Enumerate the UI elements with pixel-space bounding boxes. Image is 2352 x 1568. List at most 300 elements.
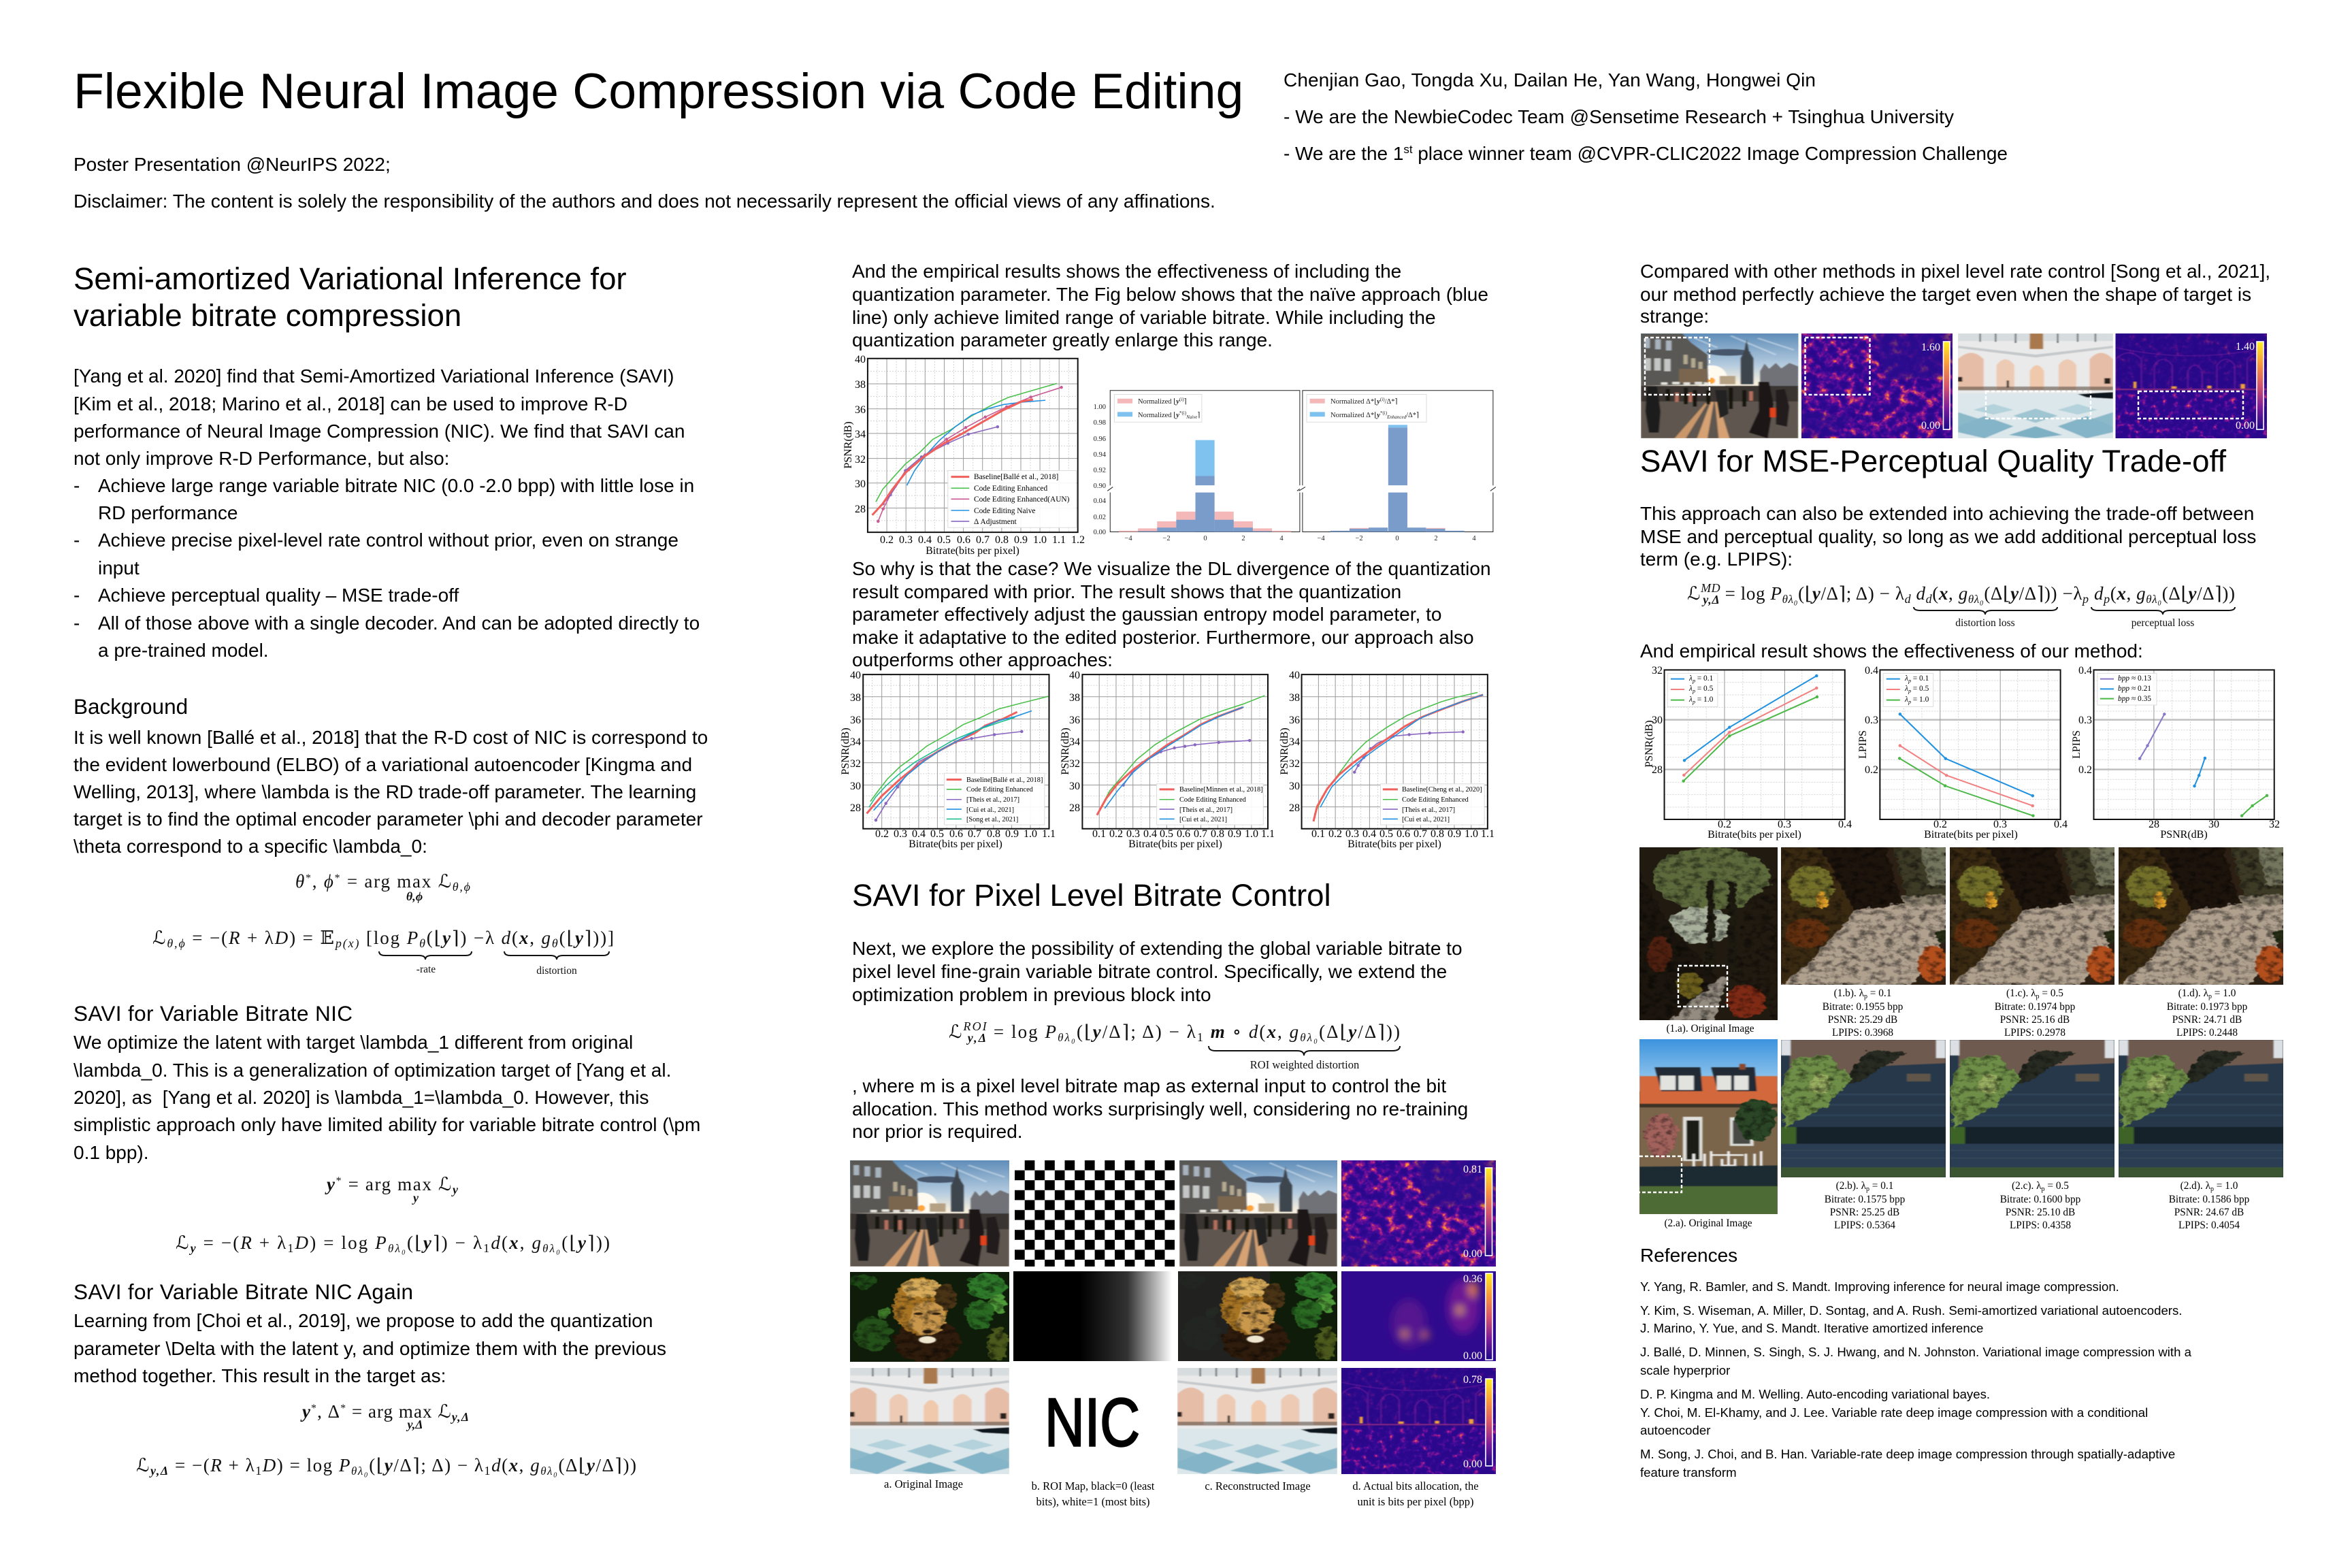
text: why is that the case: outperforms other approaches:: [852, 649, 1113, 670]
intro text and bullet list: Achieve precise pixel-level rate control without prior, even on strange: [98, 529, 679, 551]
equation: optimal parameters: θ,ϕ: [453, 880, 470, 894]
line chart: comparison with Minnen baseline: 0.9: [1228, 828, 1241, 840]
equation: L y delta: θλ₀: [540, 1465, 557, 1477]
histogram: normalized y naive: ⌉: [1184, 398, 1187, 406]
line chart: LPIPS vs PSNR: LPIPS: [2071, 730, 2082, 759]
forest captions: p: [1864, 993, 1867, 1000]
equation: optimal parameters: [295, 871, 470, 903]
line chart: comparison with Minnen baseline: 0.8: [1211, 828, 1224, 840]
equation: L y: D: [295, 1232, 309, 1253]
line chart: LPIPS vs PSNR: 30: [2208, 819, 2219, 830]
house captions: = 0.5: [2045, 1180, 2069, 1192]
line chart: LPIPS vs PSNR: 32: [2269, 819, 2280, 830]
house captions: PSNR: 24.67 dB: [2174, 1207, 2244, 1218]
text: comparison with other methods: [1640, 261, 2270, 327]
line chart: LPIPS vs bitrate: 0.3: [1993, 819, 2007, 830]
equation: rate-distortion objective with braces: [log: [360, 928, 406, 948]
line chart: comparison with Balle baseline: 0.8: [987, 828, 1000, 840]
equation: L y: ℒ: [176, 1232, 189, 1253]
text: bitmap explanation: allocation. This method works surprisingly well, considering no re-training: [852, 1098, 1468, 1120]
line chart: comparison with Minnen baseline: 0.4: [1143, 828, 1157, 840]
house captions: (2.b). λ: [1836, 1180, 1866, 1192]
histogram: normalized delta y enhanced: 2: [1434, 535, 1438, 542]
photo: lion reconstructed: [1178, 1271, 1337, 1362]
background text: [74, 727, 708, 857]
line chart: comparison with Cheng baseline: 36: [1289, 715, 1300, 726]
line chart: comparison with Cheng baseline: 0.3: [1345, 828, 1359, 840]
authors and affiliations: place winner team @CVPR-CLIC2022 Image Compression Challenge: [1413, 143, 2008, 164]
line chart: comparison with Balle baseline: 36: [850, 715, 861, 726]
text: pixel level intro: pixel level fine-grain variable bitrate control. Specifically, we extend the: [852, 961, 1447, 982]
line chart: range of variable bitrate: 0.4: [918, 534, 932, 546]
equation: L y: y⌉) − λ: [423, 1232, 482, 1253]
line chart: LPIPS vs bitrate: = 0.5: [1911, 685, 1929, 693]
equation: perceptual trade-off with braces: y/Δ⌉)): [2189, 583, 2235, 604]
equation: perceptual trade-off with braces: x, g: [2117, 583, 2146, 604]
line chart: comparison with Cheng baseline: 28: [1289, 802, 1300, 814]
line chart: comparison with Cheng baseline: Code Editing Enhanced: [1402, 796, 1469, 804]
equation: perceptual trade-off with braces: d: [1905, 592, 1912, 606]
text: empirical results: line) only achieve limited range of variable bitrate. While including the: [852, 307, 1436, 328]
equation: L y delta: θλ₀: [351, 1465, 368, 1477]
intro text and bullet list: -: [74, 585, 80, 606]
equation: L y delta: D: [262, 1455, 276, 1475]
equation: perceptual trade-off with braces: P: [1770, 583, 1782, 604]
line chart: LPIPS vs bitrate: 0.2: [1865, 764, 1878, 776]
background text: It is well known [Ballé et al., 2018] that the R-D cost of NIC is correspond to: [74, 727, 708, 748]
references list: Y. Kim, S. Wiseman, A. Miller, D. Sontag, and A. Rush. Semi-amortized variational autoencoders.: [1640, 1303, 2182, 1318]
equation: L y delta: (x, g: [502, 1455, 540, 1475]
equation: y star delta star: y,Δ: [406, 1418, 423, 1431]
photo: forest original with crop box: [1639, 847, 1778, 1020]
line chart: comparison with Minnen baseline: Baseline[Minnen et al., 2018]: [1179, 786, 1263, 794]
house captions: p: [1866, 1186, 1869, 1193]
equation: perceptual trade-off with braces: (: [1932, 583, 1938, 604]
equation: optimal parameters: θ: [295, 871, 304, 892]
line chart: range of variable bitrate: 1.1: [1052, 534, 1066, 546]
forest captions: p: [2208, 993, 2212, 1000]
histogram: normalized y naive: 0.02: [1094, 514, 1106, 521]
line chart: range of variable bitrate: 30: [855, 478, 866, 490]
line chart: comparison with Balle baseline: 0.7: [968, 828, 981, 840]
line chart: range of variable bitrate: Code Editing Enhanced: [974, 485, 1047, 493]
line chart: LPIPS vs bitrate: Bitrate(bits per pixel): [1924, 829, 2018, 840]
equation: perceptual trade-off with braces: θλ₀: [2146, 593, 2161, 606]
intro text and bullet list: -: [74, 612, 80, 634]
line chart: comparison with Cheng baseline: [Cui et al., 2021]: [1402, 816, 1450, 823]
line chart: LPIPS vs PSNR: bpp ≈ 0.13: [2118, 674, 2151, 683]
text: empirical result lead-in: And empirical result shows the effectiveness of our method:: [1640, 640, 2143, 662]
equation: ROI objective with brace: y/Δ⌉)): [1348, 1022, 1400, 1042]
line chart: PSNR vs bitrate: p: [1692, 678, 1695, 684]
line chart: comparison with Minnen baseline: 40: [1069, 670, 1080, 681]
text: trade-off intro: MSE and perceptual quality, so long as we add additional perceptual loss: [1640, 526, 2256, 547]
line chart: range of variable bitrate: 40: [855, 354, 866, 365]
references list: scale hyperprior: [1640, 1363, 1730, 1377]
histogram: normalized delta y enhanced: −4: [1317, 535, 1325, 542]
heat map: lion bits: 0.00: [1463, 1350, 1482, 1362]
line chart: range of variable bitrate: Bitrate(bits per pixel): [926, 545, 1019, 557]
line chart: comparison with Minnen baseline: 0.1: [1092, 828, 1106, 840]
line chart: LPIPS vs bitrate: p: [1908, 688, 1911, 694]
forest captions: (1.c). λ: [2006, 987, 2036, 999]
house captions: LPIPS: 0.5364: [1834, 1220, 1895, 1231]
histogram: normalized y naive: Normalized ⌊y: [1138, 398, 1179, 406]
line chart: LPIPS vs bitrate: = 0.1: [1911, 674, 1929, 683]
line chart: comparison with Balle baseline: 0.5: [930, 828, 944, 840]
text: SAVI for variable bitrate: \lambda_0. This is a generalization of optimization target of [Yang et al.: [74, 1060, 671, 1081]
text: SAVI for variable bitrate: simplistic approach only have limited ability for variable bitrate control (\pm: [74, 1114, 700, 1135]
line chart: comparison with Minnen baseline: 1.1: [1261, 828, 1275, 840]
image grid: pixel level bit allocation: [850, 1160, 1496, 1508]
line chart: PSNR vs bitrate: = 0.5: [1695, 685, 1714, 693]
line chart: range of variable bitrate: Code Editing Enhanced(AUN): [974, 495, 1070, 504]
line chart: comparison with Cheng baseline: PSNR(dB): [1279, 728, 1290, 775]
equation: rate-distortion objective with braces: θ: [419, 936, 425, 950]
photos: deck crops: [1781, 1040, 2283, 1177]
image grid captions: b. ROI Map, black=0 (least: [1032, 1480, 1155, 1492]
line chart: comparison with Minnen baseline: Code Editing Enhanced: [1179, 796, 1247, 804]
line chart: comparison with Minnen baseline: 36: [1069, 715, 1080, 726]
equation: ROI objective with brace: y/Δ⌉; Δ) − λ: [1093, 1022, 1196, 1042]
line chart: LPIPS vs bitrate: 0.4: [1865, 665, 1878, 676]
photo: market square reconstructed: [1179, 1160, 1337, 1267]
line chart: comparison with Minnen baseline: 0.3: [1126, 828, 1140, 840]
house captions: = 0.1: [1869, 1180, 1893, 1192]
equation: ROI objective with brace: ∘ d(x, g: [1232, 1022, 1298, 1042]
text: quantization parameter: parameter \Delta with the latent y, and optimize them with the previous: [74, 1338, 666, 1359]
text: trade-off intro: term (e.g. LPIPS):: [1640, 549, 1793, 570]
line chart: range of variable bitrate: 0.6: [957, 534, 970, 546]
line chart: range of variable bitrate: 0.8: [995, 534, 1009, 546]
equation: y star delta star: y: [300, 1401, 311, 1422]
line chart: comparison with Minnen baseline: 30: [1069, 781, 1080, 792]
equation: rate-distortion objective with braces: θ,ϕ: [167, 936, 185, 950]
equation: L y: [176, 1232, 610, 1255]
house captions: = 1.0: [2214, 1180, 2238, 1192]
house captions: (2.d). λ: [2180, 1180, 2210, 1192]
equation: y star delta star: *: [311, 1403, 316, 1414]
line chart: comparison with Minnen baseline: 32: [1069, 758, 1080, 770]
equation: ROI objective with brace: ℒ: [949, 1022, 962, 1042]
equation: y star delta star: = arg max ℒ: [346, 1401, 451, 1422]
histogram: normalized delta y enhanced: Normalized Δ*⌊y: [1330, 398, 1380, 406]
heading: references: References: [1640, 1245, 1737, 1266]
equation: perceptual trade-off with braces: = log: [1720, 583, 1770, 604]
text: SAVI for variable bitrate: 2020], as [Yang et al. 2020] is \lambda_1=\lambda_0. However, this: [74, 1087, 649, 1108]
equation: optimal parameters: ,: [312, 871, 323, 892]
photo: market square with target box: [1641, 333, 1798, 438]
line chart: comparison with Minnen baseline: 28: [1069, 802, 1080, 814]
authors and affiliations: - We are the NewbieCodec Team @Sensetime Research + Tsinghua University: [1284, 106, 1954, 127]
house captions: p: [2042, 1186, 2045, 1193]
equation: rate-distortion objective with braces: -rate: [416, 964, 436, 975]
references list: J. Marino, Y. Yue, and S. Mandt. Iterative amortized inference: [1640, 1321, 1983, 1335]
house captions: PSNR: 25.25 dB: [1830, 1207, 1899, 1218]
equation: optimal parameters: ϕ: [324, 871, 333, 892]
forest captions: Bitrate: 0.1973 bpp: [2167, 1001, 2248, 1013]
equation: perceptual trade-off with braces: distortion loss: [1955, 617, 2015, 629]
equation: rate-distortion objective with braces: [152, 928, 614, 977]
equation: ROI objective with brace: ROI: [963, 1019, 987, 1033]
equation: L y delta: y/Δ⌉; Δ) − λ: [385, 1455, 483, 1475]
equation: perceptual trade-off with braces: θλ₀: [1968, 593, 1984, 606]
equation: rate-distortion objective with braces: (⌊: [427, 928, 441, 948]
ROI map: gradient: [1013, 1271, 1172, 1361]
equation: perceptual trade-off with braces: d: [2089, 583, 2104, 604]
line chart: comparison with Cheng baseline: 38: [1289, 692, 1300, 704]
heading: semi-amortized variational inference: [74, 261, 627, 333]
heading: SAVI for variable bitrate NIC: SAVI for Variable Bitrate NIC: [74, 1001, 353, 1026]
house captions: LPIPS: 0.4054: [2178, 1220, 2240, 1231]
line chart: LPIPS vs PSNR: bpp ≈ 0.21: [2118, 685, 2151, 693]
equation: rate-distortion objective with braces: = −(: [186, 928, 227, 948]
line chart: LPIPS vs bitrate: LPIPS: [1857, 730, 1869, 759]
references list: Y. Choi, M. El-Khamy, and J. Lee. Variable rate deep image compression with a conditional: [1640, 1405, 2148, 1420]
line chart: LPIPS vs bitrate: λ: [1904, 696, 1908, 704]
line chart: LPIPS vs PSNR: PSNR(dB): [2160, 829, 2208, 840]
image grid: house deck comparison: [1639, 1039, 2283, 1231]
line chart: LPIPS vs bitrate: [1857, 665, 2068, 840]
line chart: comparison with Balle baseline: 40: [850, 670, 861, 681]
histogram: normalized y naive: −2: [1162, 535, 1171, 542]
line chart: range of variable bitrate: 36: [855, 404, 866, 416]
line chart: PSNR vs bitrate: [1644, 665, 1852, 840]
forest captions: p: [2036, 993, 2040, 1000]
line chart: comparison with Balle baseline: [Theis et al., 2017]: [966, 796, 1019, 804]
equation: L y delta: y,Δ: [149, 1464, 168, 1477]
line chart: comparison with Cheng baseline: Baseline[Cheng et al., 2020]: [1402, 786, 1482, 794]
equation: optimal parameters: θ,ϕ: [406, 889, 423, 903]
text: quantization parameter: Learning from [Choi et al., 2019], we propose to add the quantization: [74, 1310, 653, 1331]
heat map: market square with target box: 1.60: [1921, 342, 1940, 353]
line chart: LPIPS vs PSNR: 0.4: [2078, 665, 2092, 676]
heading: semi-amortized variational inference: variable bitrate compression: [74, 298, 461, 333]
equation: perceptual trade-off with braces: [1687, 581, 2235, 629]
image grid captions: d. Actual bits allocation, the: [1352, 1480, 1479, 1492]
line chart: LPIPS vs bitrate: = 1.0: [1911, 696, 1929, 704]
forest captions: (1.d). λ: [2178, 987, 2208, 999]
intro text and bullet list: [Kim et al., 2018; Marino et al., 2018] can be used to improve R-D: [74, 393, 627, 414]
references list: feature transform: [1640, 1465, 1737, 1480]
intro text and bullet list: -: [74, 529, 80, 551]
equation: ROI objective with brace: m: [1205, 1022, 1225, 1042]
histogram: normalized y naive: 0.04: [1094, 497, 1107, 505]
line chart: comparison with Minnen baseline: [Theis et al., 2017]: [1179, 806, 1232, 814]
line chart: comparison with Cheng baseline: [1279, 670, 1494, 850]
line chart: comparison with Cheng baseline: 30: [1289, 781, 1300, 792]
equation: L y: (⌊: [407, 1232, 422, 1253]
heat map: market square bits: 0.00: [1463, 1248, 1482, 1260]
text: bitmap explanation: nor prior is required.: [852, 1121, 1023, 1142]
line chart: PSNR vs bitrate: 0.2: [1718, 819, 1731, 830]
line chart: PSNR vs bitrate: 0.3: [1778, 819, 1791, 830]
line chart: comparison with Cheng baseline: 40: [1289, 670, 1300, 681]
forest captions: PSNR: 25.16 dB: [2000, 1014, 2070, 1026]
equation: perceptual trade-off with braces: (: [2110, 583, 2117, 604]
heat map: market square with target box: [1801, 333, 1953, 438]
line chart: range of variable bitrate: 34: [855, 429, 866, 440]
image grid captions: unit is bits per pixel (bpp): [1358, 1495, 1473, 1508]
equation: optimal parameters: *: [335, 872, 340, 884]
line chart: range of variable bitrate: 32: [855, 454, 866, 466]
equation: ROI objective with brace: ROI weighted distortion: [1250, 1058, 1359, 1071]
line chart: comparison with Cheng baseline: 0.6: [1396, 828, 1410, 840]
equation: L y delta: ) = log P: [277, 1455, 350, 1475]
heading: semi-amortized variational inference: Semi-amortized Variational Inference for: [74, 261, 627, 296]
text: why is that the case: [852, 558, 1491, 670]
text: SAVI for variable bitrate: We optimize the latent with target \lambda_1 different from original: [74, 1032, 633, 1053]
equation: y star delta star: [300, 1401, 469, 1431]
equation: L y delta: d: [491, 1455, 501, 1475]
equation: perceptual trade-off with braces: (Δ⌊: [2162, 583, 2188, 604]
equation: ROI objective with brace: θλ₀: [1058, 1031, 1075, 1044]
line chart: range of variable bitrate: 0.2: [880, 534, 894, 546]
histogram: normalized delta y enhanced: 0: [1395, 535, 1399, 542]
forest captions: = 0.1: [1867, 987, 1891, 999]
equation: L y delta: (⌊: [369, 1455, 383, 1475]
line chart: comparison with Balle baseline: [Cui et al., 2021]: [966, 806, 1014, 814]
intro text and bullet list: RD performance: [98, 502, 238, 523]
house captions: Bitrate: 0.1586 bpp: [2169, 1194, 2250, 1205]
ROI map: checkerboard: [1015, 1160, 1175, 1267]
authors and affiliations: st: [1403, 143, 1413, 156]
line chart: comparison with Balle baseline: 1.0: [1024, 828, 1037, 840]
references list: D. P. Kingma and M. Welling. Auto-encoding variational bayes.: [1640, 1387, 1990, 1401]
photo: lion original: [850, 1272, 1009, 1363]
histogram: normalized y naive: 0.90: [1094, 483, 1106, 490]
line chart: comparison with Minnen baseline: 0.6: [1177, 828, 1190, 840]
references list: [1640, 1279, 2192, 1480]
line chart: LPIPS vs PSNR: 0.3: [2078, 715, 2092, 726]
house captions: (2.c). λ: [2012, 1180, 2042, 1192]
line chart: range of variable bitrate: 0.7: [976, 534, 990, 546]
line chart: LPIPS vs PSNR: [2071, 665, 2280, 840]
background text: \theta correspond to a specific \lambda_0:: [74, 836, 427, 857]
equation: L y: ) = log P: [310, 1232, 387, 1253]
text: quantization parameter: method together. This result in the target as:: [74, 1365, 446, 1386]
text: comparison with other methods: Compared with other methods in pixel level rate control [Song et al., 2021],: [1640, 261, 2270, 282]
equation: perceptual trade-off with braces: d: [1926, 592, 1933, 606]
venue and disclaimer: Disclaimer: The content is solely the responsibility of the authors and does not necessarily represent the official views of any affinations.: [74, 191, 1215, 212]
line chart: comparison with Minnen baseline: 0.2: [1109, 828, 1123, 840]
equation: L y: d: [491, 1232, 500, 1253]
line chart: comparison with Minnen baseline: 0.7: [1194, 828, 1207, 840]
text: trade-off intro: [1640, 503, 2256, 570]
forest captions: [1666, 987, 2248, 1039]
line chart: range of variable bitrate: Code Editing Naive: [974, 507, 1035, 515]
line chart: LPIPS vs bitrate: λ: [1904, 685, 1908, 693]
text: trade-off intro: This approach can also be extended into achieving the trade-off between: [1640, 503, 2254, 524]
image grid captions: bits), white=1 (most bits): [1036, 1495, 1149, 1508]
line chart: comparison with Minnen baseline: 1.0: [1245, 828, 1258, 840]
house captions: LPIPS: 0.4358: [2010, 1220, 2071, 1231]
line chart: comparison with Cheng baseline: 0.9: [1448, 828, 1461, 840]
forest captions: = 1.0: [2212, 987, 2236, 999]
heat map: hall bits: 0.78: [1463, 1374, 1482, 1386]
line chart: comparison with Balle baseline: Bitrate(bits per pixel): [909, 838, 1002, 850]
references list: Y. Yang, R. Bamler, and S. Mandt. Improving inference for neural image compression.: [1640, 1279, 2119, 1294]
line chart: range of variable bitrate: Baseline[Ballé et al., 2018]: [974, 473, 1058, 481]
equation: perceptual trade-off with braces: MD: [1700, 581, 1720, 595]
histogram: normalized y naive: 0.94: [1094, 451, 1107, 459]
forest captions: (1.b). λ: [1834, 987, 1864, 999]
line chart: comparison with Minnen baseline: 0.5: [1160, 828, 1173, 840]
house captions: [1664, 1180, 2250, 1231]
line chart: comparison with Balle baseline: 0.6: [949, 828, 963, 840]
line chart: PSNR vs bitrate: 30: [1652, 715, 1663, 726]
equation: rate-distortion objective with braces: (⌊: [559, 928, 574, 948]
forest captions: Bitrate: 0.1955 bpp: [1823, 1001, 1904, 1013]
heat map: market square bits: 0.81: [1463, 1164, 1482, 1175]
line chart: comparison with Balle baseline: 34: [850, 736, 861, 748]
line chart: comparison with Balle baseline: Code Editing Enhanced: [966, 786, 1034, 794]
line chart: LPIPS vs PSNR: 28: [2149, 819, 2159, 830]
forest captions: PSNR: 24.71 dB: [2172, 1014, 2242, 1026]
line chart: comparison with Balle baseline: 28: [850, 802, 861, 814]
line chart: LPIPS vs bitrate: p: [1908, 678, 1911, 684]
histogram: normalized delta y enhanced: [1299, 391, 1496, 542]
line chart: range of variable bitrate: 0.3: [899, 534, 913, 546]
photo: hall with target box: [1958, 333, 2113, 438]
text: empirical results: quantization parameter greatly enlarge this range.: [852, 329, 1273, 350]
equation: y star: *: [336, 1175, 342, 1187]
heat map: market square bits: [1341, 1160, 1496, 1267]
heat map: hall bits: 0.00: [1463, 1458, 1482, 1470]
line chart: range of variable bitrate: PSNR(dB): [843, 421, 854, 469]
image row: rate control on strange targets: [1641, 333, 2267, 438]
equation: rate-distortion objective with braces: y⌉) −λ d(x, g: [442, 928, 551, 948]
line chart: comparison with Balle baseline: 0.3: [894, 828, 907, 840]
text: bitmap explanation: [852, 1075, 1468, 1142]
histogram: normalized y naive: −4: [1124, 535, 1132, 542]
line chart: LPIPS vs PSNR: bpp ≈ 0.35: [2118, 695, 2151, 703]
equation: perceptual trade-off with braces: p: [2081, 592, 2089, 606]
line chart: comparison with Cheng baseline: 1.0: [1465, 828, 1478, 840]
line chart: range of variable bitrate: 1.0: [1033, 534, 1047, 546]
line chart: comparison with Minnen baseline: 34: [1069, 736, 1080, 748]
line chart: LPIPS vs PSNR: 0.2: [2078, 764, 2092, 776]
heat map: hall with target box: [2115, 333, 2267, 438]
text: comparison with other methods: our method perfectly achieve the target even when the shape of target is: [1640, 284, 2251, 305]
equation: optimal parameters: *: [306, 872, 311, 884]
line chart: comparison with Cheng baseline: 0.2: [1328, 828, 1342, 840]
text: pixel level intro: optimization problem in previous block into: [852, 984, 1211, 1005]
authors and affiliations: - We are the 1: [1284, 143, 1403, 164]
text: SAVI for variable bitrate: [74, 1032, 700, 1163]
references list: M. Song, J. Choi, and B. Han. Variable-rate deep image compression through spatially-adaptive: [1640, 1447, 2175, 1461]
equation: L y delta: R + λ: [210, 1455, 255, 1475]
equation: rate-distortion objective with braces: θ: [552, 936, 558, 950]
authors and affiliations: Chenjian Gao, Tongda Xu, Dailan He, Yan Wang, Hongwei Qin: [1284, 69, 1816, 91]
forest captions: LPIPS: 0.2978: [2004, 1027, 2065, 1039]
equation: y star: = arg max ℒ: [342, 1174, 451, 1194]
equation: L y: θλ₀: [542, 1242, 560, 1255]
text: why is that the case: parameter effectively adjust the gaussian entropy model parameter, to: [852, 604, 1441, 625]
authors and affiliations: [1284, 69, 2008, 164]
line chart: comparison with Balle baseline: 0.9: [1005, 828, 1019, 840]
house captions: Bitrate: 0.1575 bpp: [1825, 1194, 1906, 1205]
line chart: LPIPS vs bitrate: 0.2: [1933, 819, 1947, 830]
histogram: normalized y naive: 1.00: [1094, 404, 1106, 411]
intro text and bullet list: All of those above with a single decoder. And can be adopted directly to: [98, 612, 700, 634]
intro text and bullet list: [74, 365, 700, 661]
image grid: forest path comparison: [1639, 847, 2286, 1039]
equation: perceptual trade-off with braces: (Δ⌊: [1984, 583, 2010, 604]
text: pixel level intro: [852, 938, 1463, 1005]
equation: L y: θλ₀: [388, 1242, 406, 1255]
photo: hall reconstructed: [1177, 1368, 1337, 1474]
